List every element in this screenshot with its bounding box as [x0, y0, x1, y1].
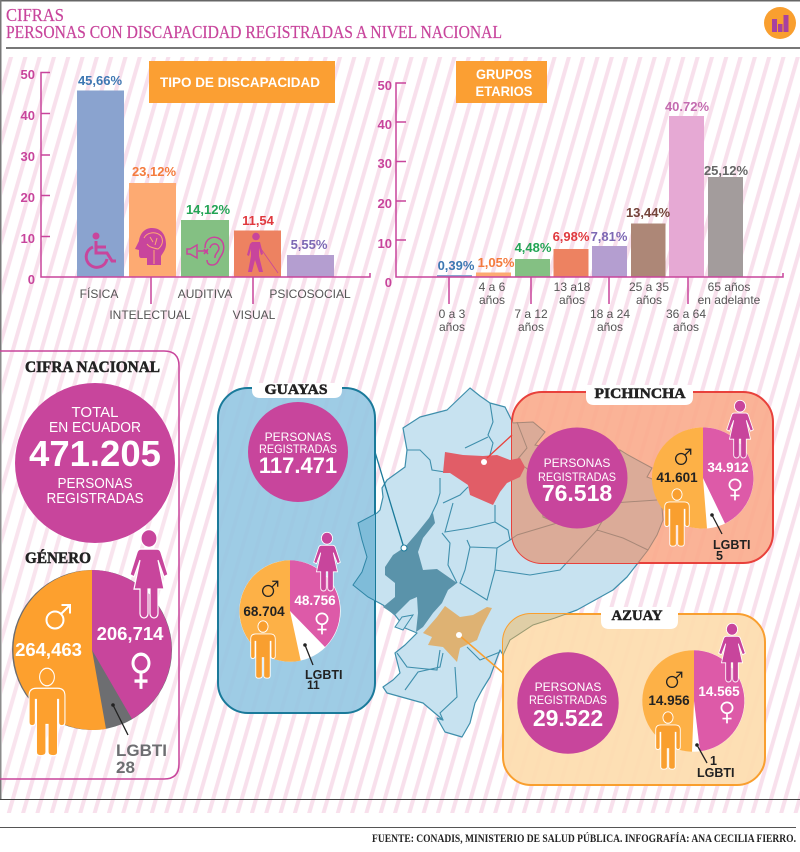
footer band — [0, 813, 800, 852]
panel: cifra nacional — [0, 351, 179, 779]
pie: genero nacional — [12, 570, 172, 730]
bar values: 45,66% — [78, 73, 122, 88]
category labels: INTELECTUAL — [109, 308, 191, 322]
heading: pichincha: PICHINCHA — [594, 386, 686, 402]
axis numbers: 10 — [378, 236, 392, 251]
category labels: 0 a 3 — [439, 307, 466, 321]
callout: lgbti — [111, 703, 167, 777]
category labels: años — [673, 320, 699, 334]
axis numbers: 40 — [378, 117, 392, 132]
axis numbers: 20 — [21, 190, 35, 205]
pie: genero guayas: 48.756 — [294, 593, 336, 608]
callout: lgbti: 11 — [307, 678, 320, 692]
bar values: 4,48% — [515, 240, 552, 255]
total circle: TOTAL — [72, 404, 118, 421]
bar values: 23,12% — [132, 164, 176, 179]
circle: personas registradas: 29.522 — [533, 705, 603, 731]
map: pichincha province — [443, 435, 525, 505]
category labels: años — [439, 320, 465, 334]
pie: genero azuay — [642, 650, 745, 752]
bar values: 5,55% — [291, 237, 328, 252]
heading: pichincha — [586, 385, 693, 405]
circle: personas registradas: PERSONAS — [265, 430, 331, 444]
pie: genero nacional: 206,714 — [97, 623, 164, 644]
map: azuay province — [423, 606, 503, 673]
callout: lgbti: LGBTI — [713, 538, 750, 552]
category labels: 7 a 12 — [514, 307, 548, 321]
bar values: 13,44% — [626, 205, 670, 220]
heading: guayas — [252, 382, 342, 398]
icon: woman — [130, 530, 168, 618]
pie: genero nacional: 264,463 — [15, 639, 82, 660]
pie: genero guayas: 68.704 — [243, 604, 285, 619]
heading: grupos etarios: GRUPOS — [476, 66, 532, 82]
circle: personas registradas — [526, 428, 628, 528]
axis numbers — [378, 78, 392, 290]
heading: grupos etarios — [456, 61, 547, 103]
total circle: 471.205 — [29, 433, 161, 474]
category labels — [80, 286, 351, 322]
map of ecuador — [353, 388, 663, 737]
bars — [77, 90, 334, 277]
callout: lgbti: 1 — [710, 754, 717, 768]
category labels: años — [479, 293, 505, 307]
category labels: 18 a 24 — [590, 307, 630, 321]
chart: grupos etarios — [378, 61, 783, 334]
bars — [437, 116, 743, 277]
bar values: 25,12% — [704, 163, 748, 178]
pie: genero pichincha: 34.912 — [707, 460, 749, 475]
axis numbers: 10 — [21, 231, 35, 246]
axis numbers: 50 — [21, 67, 35, 82]
icon: man — [656, 712, 680, 769]
title: PERSONAS CON DISCAPACIDAD REGISTRADAS A NIVEL NACIONAL — [6, 22, 502, 42]
heading: azuay: AZUAY — [612, 608, 663, 624]
axis numbers: 30 — [378, 156, 392, 171]
callout: lgbti: 28 — [116, 758, 135, 777]
icon: head with brain — [135, 228, 166, 265]
category labels: 36 a 64 — [666, 307, 706, 321]
bar values: 14,12% — [186, 202, 230, 217]
title — [6, 5, 502, 42]
axes — [41, 72, 370, 304]
heading: cifra nacional: CIFRA NACIONAL — [25, 359, 160, 376]
category labels: VISUAL — [233, 308, 276, 322]
heading: grupos etarios: ETARIOS — [476, 83, 532, 99]
category labels — [439, 280, 761, 334]
callout: lgbti — [303, 643, 342, 692]
icon: man — [251, 621, 275, 678]
pie: genero azuay: 14.565 — [698, 684, 740, 699]
heading: azuay — [601, 607, 678, 629]
circle: personas registradas: REGISTRADAS — [529, 693, 607, 707]
icon: man — [665, 489, 689, 546]
total circle: REGISTRADAS — [46, 490, 144, 507]
axis numbers: 0 — [385, 275, 392, 290]
circle: personas registradas: PERSONAS — [535, 680, 601, 694]
category labels: 13 a18 — [554, 280, 591, 294]
icon: wheelchair — [86, 232, 116, 267]
callout: lgbti: LGBTI — [116, 741, 167, 760]
category labels: AUDITIVA — [178, 287, 232, 301]
bar values: 0,39% — [438, 258, 475, 273]
category labels: años — [559, 293, 585, 307]
icon: woman — [314, 532, 340, 591]
total circle — [15, 383, 175, 543]
icon: woman — [727, 400, 753, 458]
pie: genero azuay: 14.956 — [648, 693, 690, 708]
circle: personas registradas — [248, 402, 348, 502]
map: puna island — [395, 615, 413, 630]
panel: pichincha — [511, 385, 774, 564]
category labels: 65 años — [708, 280, 750, 294]
icon: man — [29, 668, 65, 756]
icon: woman — [719, 623, 745, 682]
axis numbers: 30 — [21, 149, 35, 164]
category labels: 25 a 35 — [629, 280, 669, 294]
heading: tipo de discapacidad — [149, 61, 335, 103]
chart: tipo de discapacidad — [21, 61, 370, 322]
panel: guayas — [217, 383, 376, 714]
circle: personas registradas: REGISTRADAS — [259, 442, 337, 456]
bar values — [438, 99, 748, 273]
callout: lgbti — [695, 743, 734, 780]
total circle: EN ECUADOR — [49, 419, 141, 436]
axis numbers: 40 — [21, 108, 35, 123]
circle: personas registradas: REGISTRADAS — [538, 470, 616, 484]
title: CIFRAS — [6, 5, 64, 25]
category labels: años — [597, 320, 623, 334]
bar values: 40.72% — [665, 99, 709, 114]
icon: bar chart badge — [764, 7, 796, 39]
icon: person with cane — [247, 233, 278, 273]
bar values: 7,81% — [591, 229, 628, 244]
category labels: FÍSICA — [80, 286, 118, 301]
callout: lgbti: LGBTI — [305, 668, 342, 682]
callout: lgbti: 5 — [716, 549, 723, 563]
heading: genero: GÉNERO — [25, 550, 91, 567]
axis numbers — [21, 67, 35, 287]
bar values: 6,98% — [553, 229, 590, 244]
callout: lgbti: LGBTI — [697, 766, 734, 780]
circle: personas registradas: 76.518 — [542, 480, 612, 506]
category labels: años — [518, 320, 544, 334]
axis numbers: 50 — [378, 78, 392, 93]
bar values: 1,05% — [478, 255, 515, 270]
map: guayas province — [375, 452, 457, 632]
circle: personas registradas: PERSONAS — [544, 456, 610, 470]
pie: genero pichincha — [652, 427, 754, 529]
category labels: PSICOSOCIAL — [269, 287, 351, 301]
panel: azuay — [502, 607, 766, 786]
total circle: PERSONAS — [58, 475, 132, 492]
axis numbers: 20 — [378, 196, 392, 211]
category labels: 4 a 6 — [479, 280, 506, 294]
circle: personas registradas — [517, 652, 619, 754]
axis numbers: 0 — [28, 272, 35, 287]
icon: ear — [187, 237, 224, 265]
heading: tipo de discapacidad: TIPO DE DISCAPACIDAD — [160, 74, 320, 90]
heading: guayas: GUAYAS — [264, 382, 328, 398]
circle: personas registradas: 117.471 — [259, 453, 337, 478]
bar values: 11,54 — [242, 213, 275, 228]
callout: lgbti — [710, 513, 750, 563]
category labels: años — [636, 293, 662, 307]
pie: genero pichincha: 41.601 — [656, 470, 698, 485]
category labels: en adelante — [698, 293, 761, 307]
pie: genero guayas — [239, 560, 341, 662]
axes — [396, 83, 783, 304]
bar values — [78, 73, 328, 252]
